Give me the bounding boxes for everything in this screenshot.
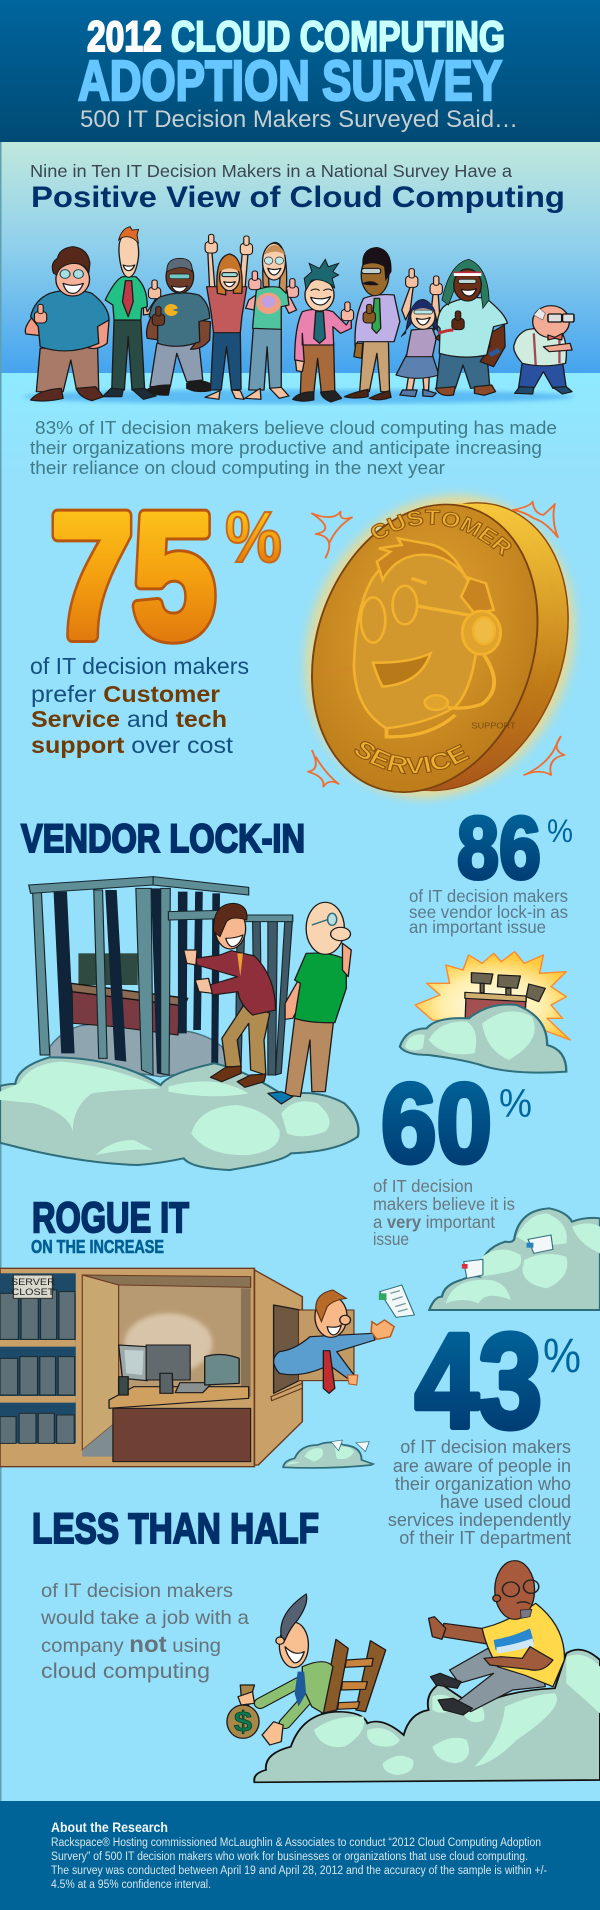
- 83 percent statement: 83% of IT decision makers believe cloud computing has made: [35, 417, 557, 438]
- 75 percent caption: of IT decision makers: [30, 653, 249, 679]
- heading: less than half: LESS THAN HALF: [32, 1505, 319, 1553]
- server closet sign: [11, 1275, 55, 1298]
- 60 percent caption: [373, 1176, 515, 1249]
- 83 percent statement: their reliance on cloud computing in the next year: [30, 457, 445, 478]
- person 4: woman arms raised: [205, 234, 253, 399]
- heading: rogue it: ROGUE IT: [32, 1194, 189, 1242]
- number face: 75: [51, 479, 215, 674]
- footer body: The survey was conducted between April 19 and April 28, 2012 and the accuracy of the sample is within +/-: [51, 1865, 547, 1877]
- footer body: [51, 1837, 547, 1891]
- 60 percent caption: a very important: [373, 1212, 495, 1232]
- inner left wall: [82, 1275, 119, 1450]
- small cloud with burst of office: [400, 952, 570, 1073]
- sky gradient background: [0, 142, 600, 373]
- percent sign: %: [499, 1082, 532, 1126]
- left edge strip: [0, 142, 2, 1801]
- 43 percent caption: have used cloud: [440, 1492, 571, 1512]
- coin small word cloud: CLOUD: [321, 665, 353, 675]
- 83 percent statement: their organizations more productive and anticipate increasing: [30, 437, 542, 458]
- coin lettering bottom: [352, 752, 469, 773]
- person 6: spiky hair pink shirt: [293, 259, 354, 402]
- person 5: long-haired hippie: [245, 242, 298, 399]
- 83 percent statement: [30, 417, 557, 478]
- person 9: dreadlocks cyan shirt: [435, 259, 507, 395]
- less than half caption: cloud computing: [41, 1660, 210, 1683]
- desk inside cage: [71, 953, 187, 1035]
- man with money bag: [227, 1594, 333, 1745]
- less than half caption: would take a job with a: [40, 1607, 249, 1629]
- 86 percent caption: of IT decision makers: [409, 886, 568, 906]
- stat 60%: 60: [381, 1061, 492, 1186]
- coin glow: [272, 471, 600, 822]
- heading: rogue it: [31, 1194, 189, 1257]
- header banner: [0, 0, 600, 142]
- 75 percent caption: [30, 653, 249, 758]
- percent sign: %: [225, 498, 282, 578]
- floor shadow: [23, 389, 574, 404]
- percent sign: %: [547, 813, 573, 849]
- 86 percent caption: an important issue: [409, 917, 546, 937]
- coin small word support: SUPPORT: [471, 721, 516, 730]
- big cloud: [0, 1057, 358, 1170]
- illustration: customer service gold coin: [298, 488, 582, 804]
- cloud with papers: [429, 1208, 600, 1310]
- 60 percent caption: issue: [373, 1229, 409, 1249]
- man reaching from window: [274, 1290, 394, 1393]
- 60 percent caption: makers believe it is: [373, 1194, 515, 1214]
- 43 percent caption: services independently: [388, 1510, 571, 1530]
- floor band: [0, 373, 600, 483]
- less than half caption: [40, 1580, 249, 1683]
- intro heading: Nine in Ten IT Decision Makers in a National Survey Have a: [30, 161, 512, 181]
- person 3: pacman tee: [147, 258, 210, 395]
- 75 percent caption: support over cost: [31, 732, 233, 758]
- illustration: row of IT decision makers: [23, 227, 574, 404]
- 43 percent caption: of IT decision makers: [400, 1437, 571, 1457]
- less than half caption: of IT decision makers: [41, 1580, 233, 1602]
- back grey cloud: [50, 1022, 230, 1077]
- person 1: curly hair blue polo: [25, 247, 109, 401]
- ceiling: [82, 1275, 251, 1287]
- money bag: [227, 1685, 259, 1738]
- floor: [82, 1420, 251, 1457]
- cage bars: [29, 877, 293, 1075]
- 60 percent caption: of IT decision: [373, 1176, 473, 1196]
- person 7: moustache lavender shirt: [344, 247, 400, 400]
- side window and door: [271, 1305, 354, 1401]
- closet box: [0, 1268, 354, 1467]
- big stat 75%: 75: [51, 479, 215, 674]
- footer body: Survery” of 500 IT decision makers who work for businesses or organizations that use cloud computing.: [51, 1851, 528, 1863]
- illustration: men on clouds: [227, 1561, 600, 1782]
- positive view headline: Positive View of Cloud Computing: [31, 181, 565, 214]
- money bag: $: [234, 1706, 252, 1738]
- illustration: customer service gold coin: CUSTOMER: [370, 509, 512, 557]
- intro heading: [30, 161, 565, 214]
- stat 43%: 43: [415, 1307, 542, 1456]
- 43 percent caption: of their IT department: [399, 1528, 571, 1548]
- coin edge: [296, 483, 599, 811]
- person 2: tall redhead green shirt: [103, 227, 161, 399]
- desk: [109, 1387, 251, 1462]
- 86 percent caption: see vendor lock-in as: [409, 902, 568, 922]
- footer panel: [0, 1801, 600, 1910]
- man in green shirt: [268, 902, 351, 1104]
- illustration: vendor lock-in cage on cloud: [0, 877, 570, 1170]
- less than half caption: company not using: [41, 1631, 221, 1657]
- spark lines: [308, 502, 564, 787]
- server shelves: [0, 1273, 76, 1443]
- heading: vendor lock-in: VENDOR LOCK-IN: [21, 817, 305, 861]
- paper note blue: [528, 1235, 553, 1253]
- footer body: Rackspace® Hosting commissioned McLaughlin & Associates to conduct “2012 Cloud Computing Adoption: [51, 1837, 541, 1849]
- sitting man: [429, 1561, 564, 1715]
- percent sign: %: [543, 1330, 581, 1383]
- coin lettering top: [377, 524, 505, 558]
- ladder: [321, 1639, 386, 1713]
- subheading: ON THE INCREASE: [31, 1237, 164, 1257]
- right inner strip: [241, 1288, 251, 1397]
- footer body: 4.5% at a 95% confidence interval.: [51, 1879, 211, 1891]
- illustration: rogue IT closet: [0, 1208, 600, 1468]
- 75 percent caption: prefer Customer: [31, 681, 220, 707]
- desk and monitors: [465, 973, 545, 1030]
- large cloud: [254, 1650, 600, 1782]
- glow: [124, 1313, 212, 1373]
- stat 86%: 86: [457, 798, 541, 897]
- server closet sign: SERVER: [11, 1278, 55, 1288]
- man in red sweater: [184, 903, 276, 1087]
- title line one: 2012 CLOUD COMPUTING: [87, 13, 505, 61]
- coin face: [281, 485, 569, 812]
- person 10: grumpy old man: [514, 306, 574, 394]
- flying paper: [379, 1285, 414, 1317]
- illustration: customer service gold coin: SERVICE: [354, 741, 470, 774]
- subtitle: 500 IT Decision Makers Surveyed Said…: [80, 106, 518, 133]
- 43 percent caption: are aware of people in: [393, 1456, 571, 1476]
- server closet sign: CLOSET: [12, 1288, 54, 1298]
- person 8: girl thumbs up: [396, 269, 442, 397]
- 86 percent caption: [409, 886, 568, 937]
- back wall: [119, 1285, 251, 1395]
- computer monitors: [119, 1345, 239, 1395]
- engraved head: [354, 538, 501, 737]
- 43 percent caption: [388, 1437, 571, 1548]
- tiny cloud: [283, 1440, 373, 1468]
- paper note red: [464, 1259, 483, 1278]
- 75 percent caption: Service and tech: [31, 706, 227, 732]
- 43 percent caption: their organization who: [395, 1474, 571, 1494]
- footer heading: About the Research: [51, 1819, 168, 1835]
